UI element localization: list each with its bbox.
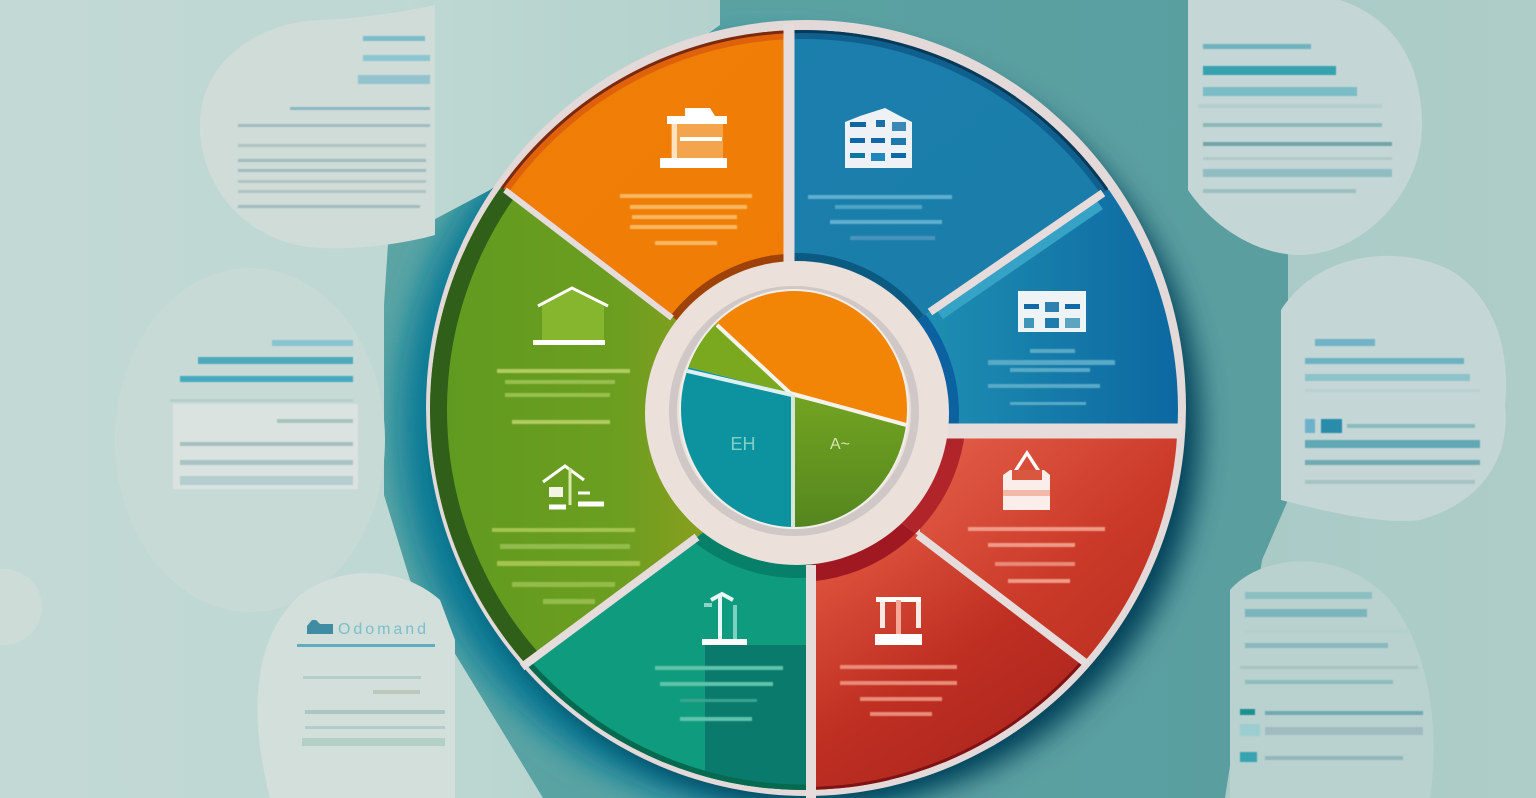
wheel outer ring — [426, 20, 1186, 796]
centre label left: EH — [730, 434, 756, 454]
text: green bottom segment — [492, 528, 640, 604]
panel: mid-right notes — [1305, 339, 1480, 484]
slice: green large — [795, 397, 906, 527]
teal halo behind the wheel — [380, 0, 1300, 798]
centre label right: A~ — [830, 436, 850, 453]
icon: red house — [1003, 450, 1050, 510]
panel: bottom-left notes: Odomand — [338, 621, 426, 638]
segment: blue right — [917, 190, 1178, 424]
panel: top-left notes — [238, 36, 430, 208]
segment: teal — [528, 532, 812, 790]
segment: green — [430, 186, 703, 662]
panel: bottom-right notes — [1240, 592, 1423, 762]
slice: green small — [688, 324, 786, 392]
segment: orange — [501, 30, 784, 320]
slice: teal — [681, 367, 792, 527]
text: orange segment — [620, 194, 752, 245]
centre ring — [645, 261, 949, 565]
panel: mid-left notes — [170, 340, 358, 489]
text: green top segment — [497, 369, 630, 424]
text: red bottom segment — [840, 665, 957, 716]
segment: blue top — [794, 30, 1108, 320]
segment separators — [505, 24, 1182, 798]
panel: top-right notes — [1198, 44, 1392, 193]
text: red right segment — [968, 527, 1105, 583]
icon: green house lower — [543, 466, 604, 507]
centre pie chart — [679, 289, 909, 529]
icon: blue building right — [1018, 291, 1086, 332]
icon: red scale — [875, 597, 922, 645]
icon: blue building top — [845, 108, 912, 168]
panel: bottom-left notes — [297, 620, 445, 746]
wheel segments — [425, 20, 1190, 798]
segment: red bottom — [812, 523, 1082, 790]
segment text lines — [492, 194, 1115, 721]
slice: orange — [716, 291, 907, 424]
icon: green house top — [533, 288, 608, 345]
icon: orange building — [660, 108, 727, 168]
text: blue right segment — [988, 349, 1115, 405]
icon: teal building — [702, 594, 747, 642]
segment: red right — [902, 438, 1177, 659]
text: teal segment — [655, 666, 783, 721]
text: blue top segment — [808, 195, 952, 240]
